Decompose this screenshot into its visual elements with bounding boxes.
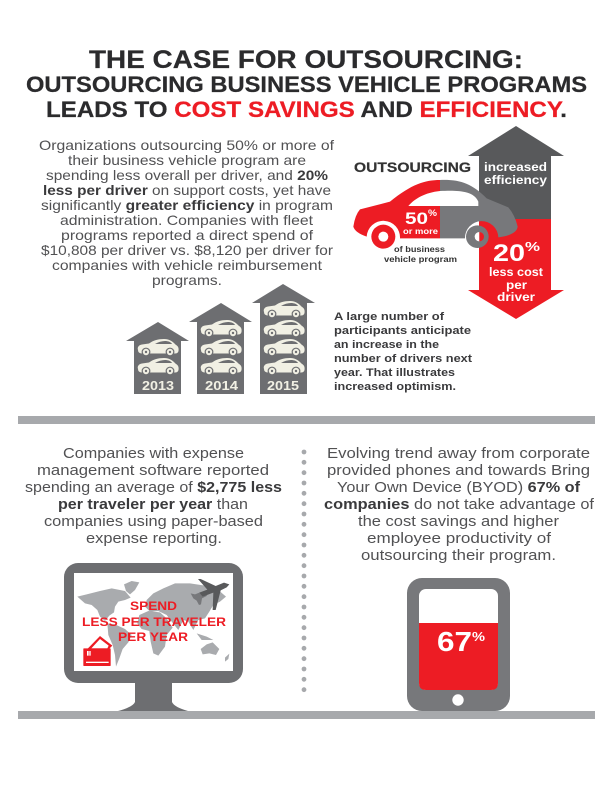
text block: outsourcing summary: significantly greater efficiency in program xyxy=(41,197,333,213)
stat: 67%: % xyxy=(472,629,485,644)
text block: BYOD trend: outsourcing their program. xyxy=(361,547,556,564)
text block: expense management: companies using paper-based xyxy=(44,513,263,530)
text block: outsourcing summary: companies with vehicle reimbursement xyxy=(52,257,322,273)
text block: driver optimism: year. That illustrates xyxy=(334,367,455,379)
text block: outsourcing summary: less per driver on support costs, yet have xyxy=(43,182,331,198)
label: of business vehicle program xyxy=(384,245,457,264)
text block: driver optimism: A large number of xyxy=(334,311,444,323)
text block: BYOD trend: employee productivity of xyxy=(367,530,552,547)
arrow: 2014 xyxy=(189,303,252,394)
stat: 20% less cost per driver: % xyxy=(525,239,541,254)
title: THE CASE FOR OUTSOURCING: xyxy=(89,46,523,74)
text block: expense management: per traveler per year than xyxy=(58,496,248,513)
stat: 67%: 67 xyxy=(437,626,472,657)
text block: expense management: spending an average of $2,775 less xyxy=(25,479,282,496)
text block: BYOD trend: Evolving trend away from corporate xyxy=(327,445,590,462)
text block: expense management: management software reported xyxy=(37,462,269,479)
text block: BYOD trend: companies do not take advantage of xyxy=(324,496,595,513)
icon: credit card xyxy=(83,636,112,666)
stat: 50% or more: 50 xyxy=(405,209,428,228)
arrow: less cost xyxy=(468,219,564,319)
label: increased efficiency: efficiency xyxy=(484,173,547,187)
stat: 20% less cost per driver: less cost xyxy=(489,265,543,279)
text block: driver optimism: an increase in the xyxy=(334,339,439,351)
text block: outsourcing summary: programs reported a direct spend of xyxy=(61,227,313,243)
infographic: outsourcing car and arrows xyxy=(353,126,564,319)
stat: 20% less cost per driver: 20 xyxy=(493,240,525,267)
text block: driver optimism: number of drivers next xyxy=(334,353,472,365)
text block: driver optimism xyxy=(334,311,472,393)
car xyxy=(353,180,518,249)
text block: driver optimism: participants anticipate xyxy=(334,325,471,337)
text block: outsourcing summary xyxy=(39,137,334,288)
stat: 20% less cost per driver xyxy=(489,239,543,304)
label: spend less per traveler per year: SPEND xyxy=(130,599,177,613)
arrow: 2015: 2015 xyxy=(267,379,299,393)
world map xyxy=(77,581,229,667)
label: spend less per traveler per year: LESS PER TRAVELER xyxy=(82,615,226,629)
text block: outsourcing summary: Organizations outsourcing 50% or more of xyxy=(39,137,334,153)
title: LEADS TO COST SAVINGS AND EFFICIENCY . xyxy=(46,97,567,122)
stat: 50% or more: % xyxy=(428,208,437,218)
icon: desktop monitor with world map xyxy=(64,563,243,711)
title xyxy=(26,46,587,122)
text block: expense management: expense reporting. xyxy=(86,530,222,547)
text block: outsourcing summary: spending less overall per driver, and 20% xyxy=(46,167,328,183)
label: spend less per traveler per year: PER YEAR xyxy=(118,630,188,644)
text block: BYOD trend: provided phones and towards Bring xyxy=(327,462,590,479)
label: increased efficiency: increased xyxy=(484,160,547,174)
stat: 20% less cost per driver: driver xyxy=(497,290,535,304)
label: of business vehicle program: vehicle program xyxy=(384,255,457,264)
label: of business vehicle program: of business xyxy=(394,245,446,254)
label: increased efficiency xyxy=(484,160,547,187)
stat: 67% xyxy=(437,626,485,657)
stat: 50% or more: or more xyxy=(403,226,438,236)
text block: outsourcing summary: programs. xyxy=(152,272,222,288)
chart: driver growth arrows 2013-2015 xyxy=(126,284,315,394)
icon: phone showing 67% xyxy=(407,578,510,711)
arrow: increased efficiency xyxy=(468,126,564,219)
text block: driver optimism: increased optimism. xyxy=(334,381,456,393)
arrow: 2013 xyxy=(126,322,189,394)
title: OUTSOURCING BUSINESS VEHICLE PROGRAMS xyxy=(26,72,587,97)
arrow: 2014: 2014 xyxy=(205,379,238,393)
text block: outsourcing summary: administration. Companies with fleet xyxy=(60,212,313,228)
text block: BYOD trend: the cost savings and higher xyxy=(358,513,559,530)
icon: airplanes xyxy=(191,579,229,610)
arrow: 2013: 2013 xyxy=(142,379,174,393)
label: spend less per traveler per year xyxy=(82,599,226,644)
text block: BYOD trend: Your Own Device (BYOD) 67% of xyxy=(337,479,581,496)
text block: expense management: Companies with expense xyxy=(63,445,244,462)
stat: 50% or more xyxy=(403,208,438,236)
text block: BYOD trend xyxy=(324,445,595,564)
text block: expense management xyxy=(25,445,282,547)
stat: 20% less cost per driver: per xyxy=(506,278,527,292)
text block: outsourcing summary: their business vehicle program are xyxy=(68,152,306,168)
arrow: 2015 xyxy=(252,284,315,394)
text block: outsourcing summary: $10,808 per driver vs. $8,120 per driver for xyxy=(41,242,333,258)
label: outsourcing: OUTSOURCING xyxy=(354,160,471,175)
